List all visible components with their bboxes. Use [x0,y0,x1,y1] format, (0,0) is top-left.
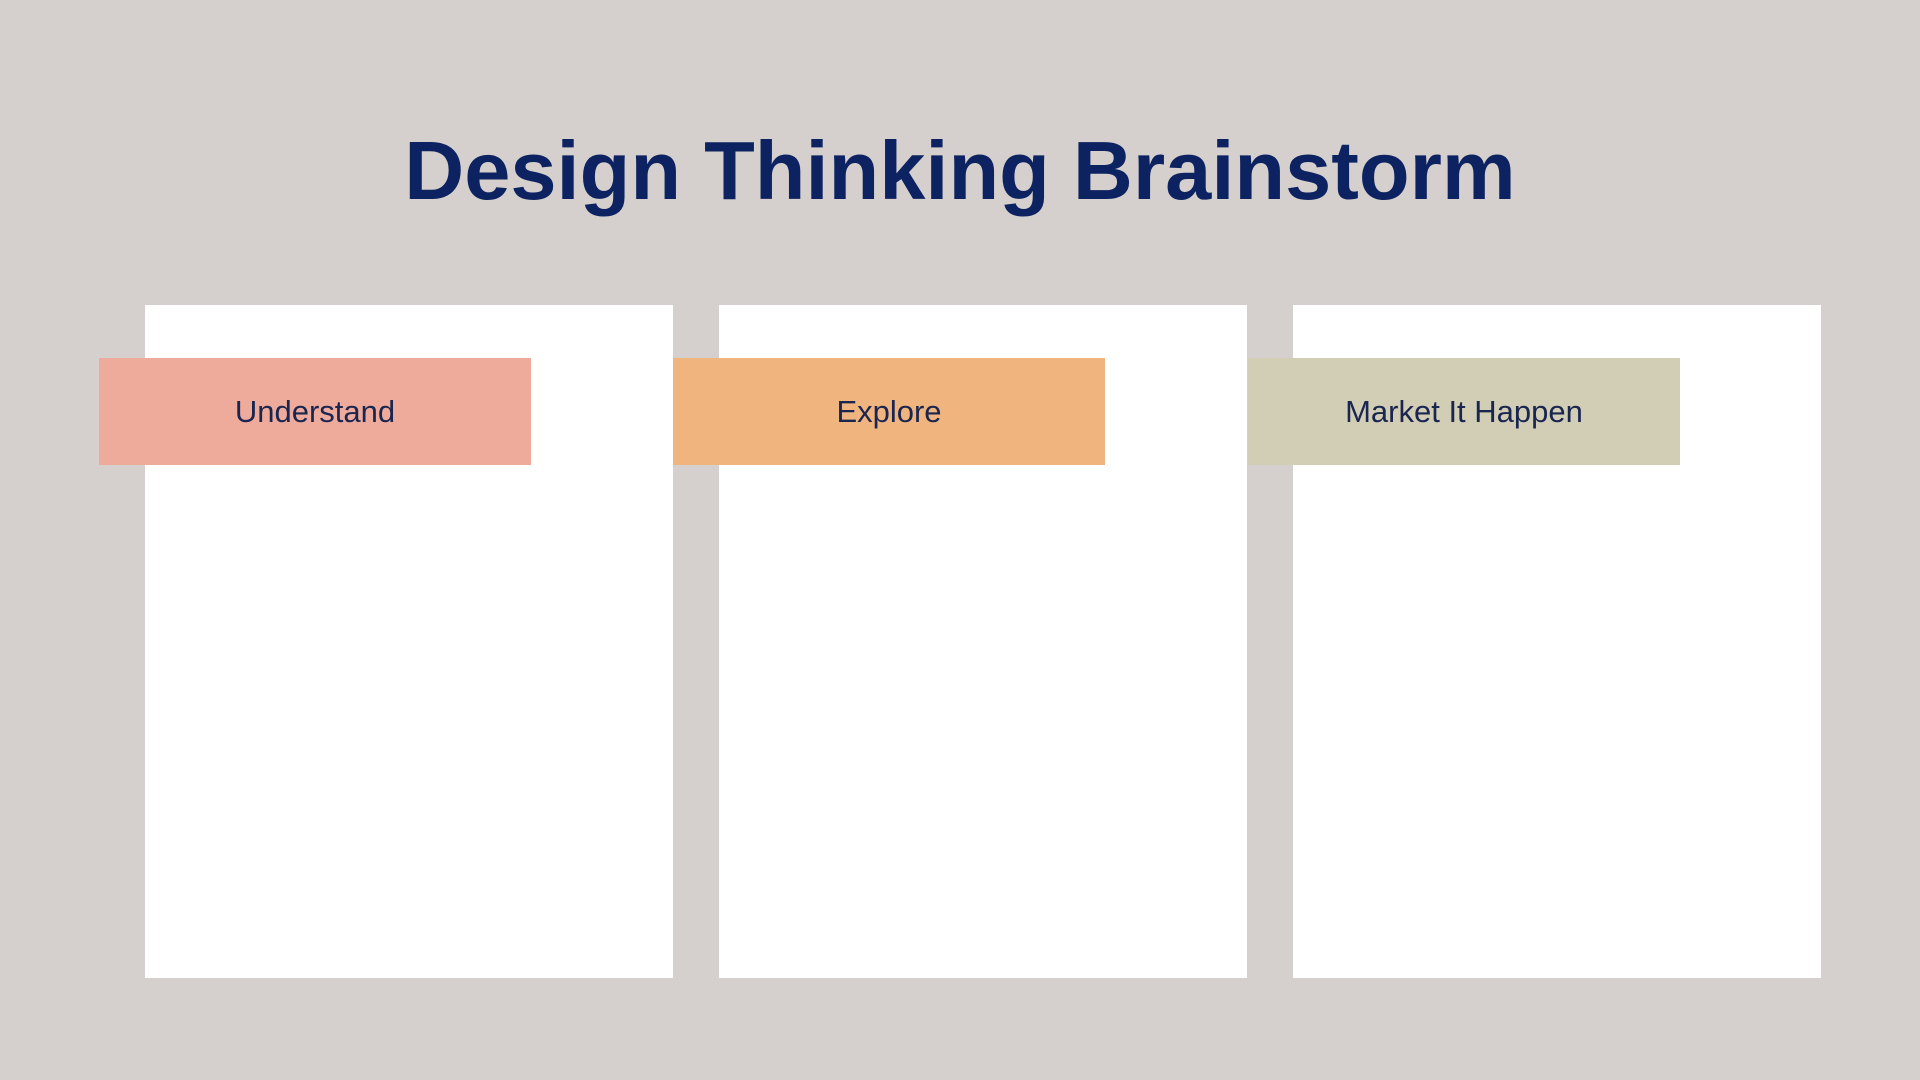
panel: explore [719,305,1247,978]
label: market it happen [1248,358,1680,465]
label: understand: Understand [235,394,395,428]
label: understand [99,358,531,465]
panel: understand [145,305,673,978]
label: market it happen: Market It Happen [1345,394,1583,428]
label: explore: Explore [836,394,942,428]
label: explore [673,358,1105,465]
panel: market it happen [1293,305,1821,978]
title: Design Thinking Brainstorm [404,124,1516,217]
